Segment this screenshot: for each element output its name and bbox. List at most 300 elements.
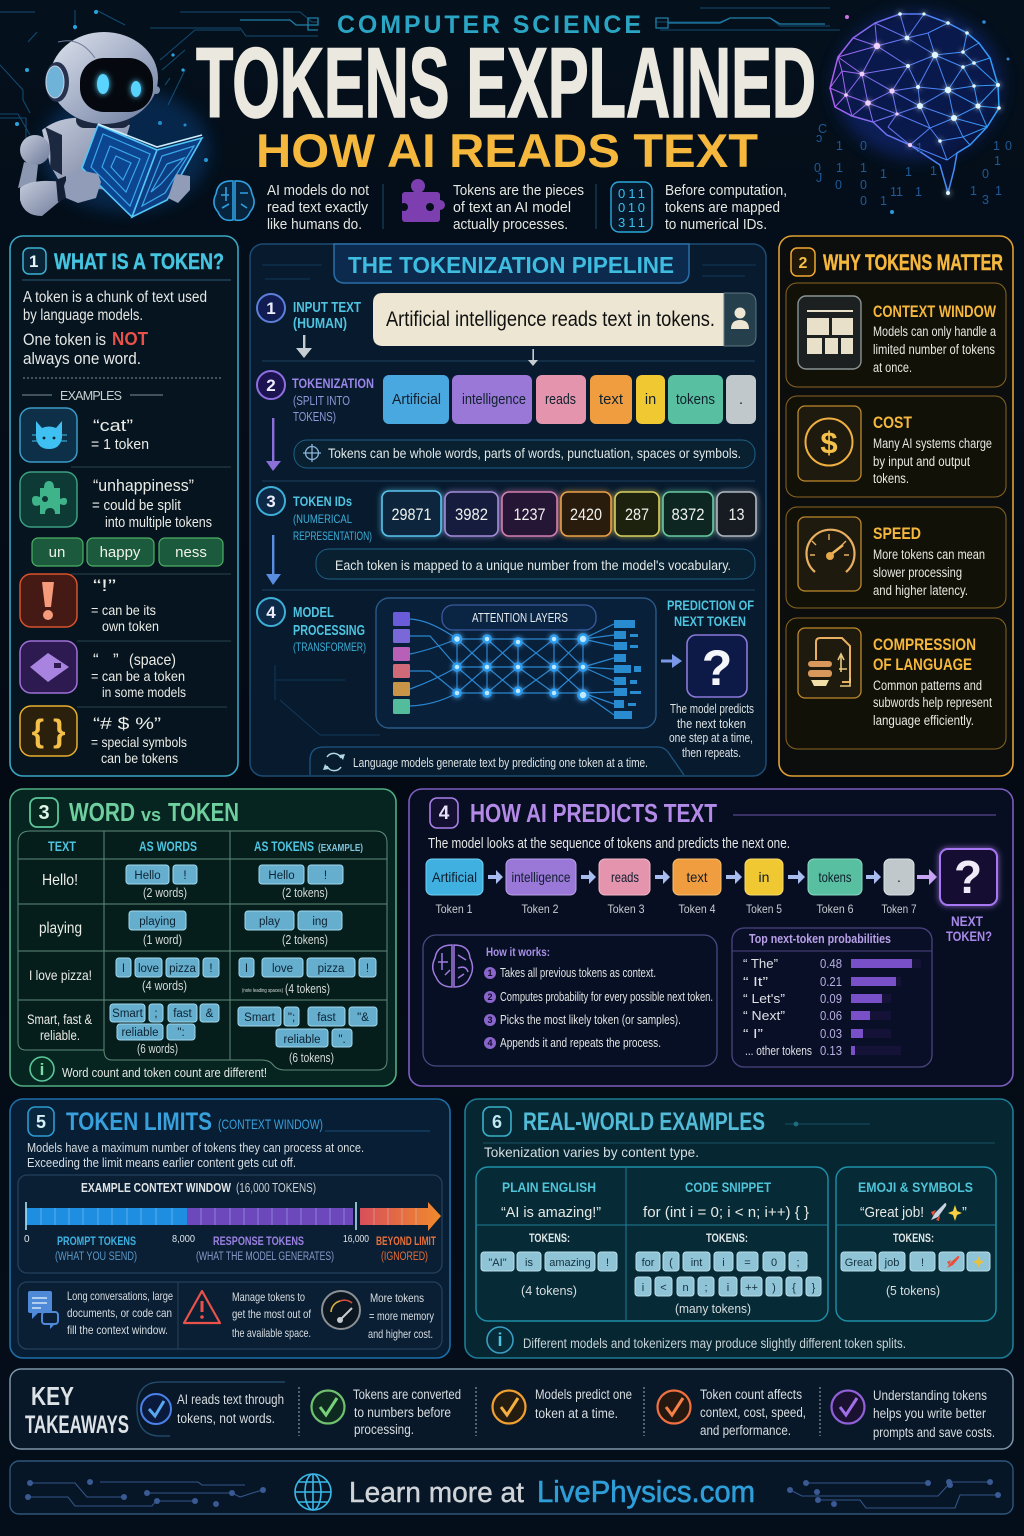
robot eyes [97,74,141,97]
axis labels [24,1234,369,1245]
probability labels: “ Next” [743,1009,785,1023]
prediction of next token: then repeats. [682,746,741,760]
token chips: un happy ness: un [49,544,65,561]
arrow: step 3 down [266,535,281,585]
card: speed [786,507,1006,608]
token chips: un happy ness: happy [100,544,141,561]
prediction of next token: one step at a time, [669,731,753,745]
takeaway 4: and performance. [700,1423,791,1438]
definition text: One token is [23,330,106,349]
description: Models have a maximum number of tokens they can process at once. [27,1141,364,1155]
segment labels: (WHAT THE MODEL GENERATES) [196,1251,334,1263]
header circuit decoration [0,8,840,210]
prediction of next token: ? [702,640,732,696]
output bars [614,620,641,719]
example: symbols: “# $ %” [93,714,161,733]
description: Exceeding the limit means earlier content gets cut off. [27,1156,296,1170]
token labels [436,902,917,916]
word chips: Smart [112,1008,144,1020]
icon: warning triangle [184,1291,220,1323]
column: plain english: “AI is amazing!” [501,1205,601,1221]
panel 4: how AI predicts text [409,789,1013,1086]
takeaway 2: processing. [354,1422,414,1437]
heading [23,248,224,274]
step 4: model processing [257,598,366,654]
note: tokens can be [294,440,755,468]
comparison table [18,831,387,1070]
input sentence box: Artificial intelligence reads text in tokens. [386,308,715,331]
column: plain english: "AI" [488,1257,507,1269]
column: code snippet: 0 [771,1257,777,1269]
column: plain english: is [525,1257,533,1269]
probability labels: ... other tokens [745,1044,812,1058]
takeaway 5: helps you write better [873,1406,986,1421]
heading: 4 [439,803,450,824]
token ID boxes: 2420 [570,505,602,524]
binary digit rain: 1 [836,139,843,153]
examples table: plain english and code [476,1167,828,1321]
token sequence: reads [611,869,639,885]
token chips: "; [288,1012,295,1024]
heading: TOKEN [168,797,239,827]
token chips: Smart [244,1012,276,1024]
row labels: I love pizza! [29,967,92,983]
heading [430,798,996,828]
binary digit rain: 1 [995,184,1002,198]
takeaway 5 [832,1388,995,1440]
step 4: model processing: PROCESSING [293,622,365,639]
binary digit rain: J [816,171,822,185]
probability bars [851,959,912,1055]
icon: rocket [931,1203,946,1221]
column: code snippet: ; [796,1257,800,1269]
card: context window [786,283,1006,387]
definition text: NOT [112,329,148,349]
tips box: Long conversations, large [67,1289,173,1303]
fact: AI reading: read text exactly [267,199,368,216]
next token box: ? [954,851,982,903]
binary digit rain: 1 [970,184,977,198]
token chips row: . [739,392,743,408]
segment labels [55,1236,436,1263]
token labels: Token 6 [816,902,854,916]
token sequence: intelligence [512,869,571,885]
bar: prompt tokens [26,1208,187,1225]
step 4: model processing: (TRANSFORMER) [293,640,366,654]
token ID boxes: 29871 [392,505,432,524]
column: plain english: (4 tokens) [521,1283,577,1298]
table header: AS WORDS [139,839,197,854]
binary digit rain: C [818,122,827,136]
column: code snippet: (many tokens) [675,1301,751,1316]
token chips row: reads [545,392,576,408]
column: plain english: TOKENS: [529,1231,570,1245]
card: compression of language: OF LANGUAGE [873,656,972,674]
step 3: token IDs: 3 [266,492,276,511]
fact: numerical IDs [665,182,787,233]
tips box [18,1282,442,1349]
card: compression of language [786,618,1006,749]
probability labels: “ The” [743,957,778,971]
probability labels: “ Let's” [743,992,785,1006]
arrow: step 1 down [296,335,312,358]
takeaways heading: KEY [31,1381,74,1411]
info note [487,1327,906,1353]
word chips: pizza [169,963,197,975]
token labels: Token 7 [882,902,917,916]
word chips: ": [177,1027,185,1039]
column: code snippet: i [727,1282,729,1294]
heading: 5 [36,1112,46,1132]
segment labels: (IGNORED) [381,1251,428,1263]
icon: globe [295,1474,331,1510]
panel 5: token limits [10,1099,450,1358]
token chips row [383,375,756,424]
example: space: ” [113,650,119,669]
step 2: tokenization: TOKENIZATION [292,375,374,391]
column: plain english [481,1179,617,1298]
word chips: reliable [121,1027,159,1039]
column: plain english: PLAIN ENGLISH [502,1179,596,1195]
card: speed: slower processing [873,565,962,580]
takeaway 5: Understanding tokens [873,1388,987,1403]
column: code snippet: int [691,1257,702,1269]
takeaway 3: token at a time. [535,1406,618,1421]
heading [30,797,239,827]
footer banner [10,1461,1013,1514]
table grid [18,831,387,1070]
count captions: (1 word) [143,933,182,947]
call to action [349,1474,755,1509]
definition text: A token is a chunk of text used [23,289,207,306]
column: code snippet: } [812,1282,816,1294]
tips box: documents, or code can [67,1306,172,1320]
note: vocabulary mapping [316,549,755,579]
token chips row: intelligence [462,392,526,408]
takeaway 3 [492,1387,632,1424]
binary digit rain: 1 [916,141,923,155]
heading: vs [141,805,161,825]
illustration: robot reading a glowing book [18,32,210,217]
definition text: by language models. [23,307,143,324]
token ID boxes: 13 [728,505,744,524]
probability table: Top next-token probabilities [749,931,891,946]
footer note: generation loop [310,747,684,775]
token ID boxes: 287 [625,505,649,524]
step 3: token IDs: REPRESENTATION) [293,529,372,543]
word chips [110,865,219,1040]
token chips: fast [317,1012,337,1024]
column: code snippet: ( [669,1257,673,1269]
segment labels: (WHAT YOU SEND) [55,1251,137,1263]
count captions [137,886,334,1065]
icon: puzzle piece [400,179,445,222]
steps list: 4 [487,1038,493,1048]
column: plain english: ! [606,1257,609,1269]
context window chart: EXAMPLE CONTEXT WINDOW [81,1181,231,1195]
context window chart: (16,000 TOKENS) [236,1181,316,1195]
heading: 6 [492,1112,502,1132]
steps list [484,966,713,1050]
tips box: = more memory [369,1309,434,1323]
illustration: neural network brain [830,11,1010,195]
example: exclamation: own token [102,618,159,634]
word chips: ; [154,1008,158,1020]
token chips: un happy ness [32,538,223,566]
token chips: ing [312,916,328,928]
binary digit rain: 1 [896,185,903,199]
takeaway 2: Tokens are converted [353,1387,461,1402]
binary digit rain: 0 [982,167,989,181]
token chips row: Artificial [392,392,441,408]
tips box: the available space. [232,1326,311,1340]
count captions: (2 words) [143,886,187,900]
prediction of next token: The model predicts [670,702,754,716]
column: code snippet: CODE SNIPPET [685,1179,771,1195]
column: code snippet: for (int i = 0; i < n; i++) { } [643,1205,809,1221]
example: exclamation [20,574,159,634]
card: compression of language: subwords help represent [873,695,992,710]
heading: 1 [29,252,38,271]
takeaway 5: prompts and save costs. [873,1425,995,1440]
binary digit rain: 0 [814,161,821,175]
step 4: model processing: MODEL [293,604,334,621]
token chips row: tokens [676,392,715,408]
binary digit rain: 1 [994,154,1001,168]
definition text: always one word. [23,349,141,368]
step 4: model processing: 4 [266,603,276,622]
example: unhappiness: into multiple tokens [105,515,212,531]
binary digit rain: 1 [930,164,937,178]
row labels: Hello! [42,872,78,889]
pipeline heading [334,244,689,283]
step 1: input text [257,294,361,332]
table header: TEXT [48,839,77,854]
card: cost: by input and output [873,454,970,469]
footer note: generation loop: Language models generate text by predicting one token at a time. [353,756,648,770]
example: space: “ [93,650,99,669]
examples label: EXAMPLES [60,389,122,403]
transformer network diagram [376,598,656,728]
card: compression of language: Common patterns and [873,678,982,693]
icon: binary box [611,182,652,232]
token sequence: tokens [818,869,852,885]
segment labels: RESPONSE TOKENS [213,1236,304,1248]
takeaway 4 [658,1387,806,1438]
prediction of next token: PREDICTION OF [667,597,754,613]
token ID boxes: 3982 [455,505,488,524]
binary digit rain: 1 [993,139,1000,153]
column: code snippet: ) [772,1282,776,1294]
step 2: tokenization: (SPLIT INTO [293,393,350,408]
example: exclamation: “!” [93,576,116,595]
axis labels: 8,000 [172,1234,195,1245]
column: code snippet: i [722,1257,725,1269]
card: context window: Models can only handle a [873,324,996,339]
table header: AS TOKENS [254,839,314,854]
input sentence box [373,293,756,346]
examples box: emoji and symbols [836,1167,996,1321]
steps list: 3 [487,1015,493,1025]
segment labels: PROMPT TOKENS [57,1236,136,1248]
header title block [196,11,816,177]
steps list: Appends it and repeats the process. [500,1036,661,1050]
token chips: love [272,963,293,975]
heading: HOW AI PREDICTS TEXT [470,798,717,828]
panel 3: word vs token [10,789,396,1086]
fact: token pieces [453,182,584,233]
info note: Different models and tokenizers may produce slightly different token splits. [523,1336,906,1351]
binary digit rain: 1 [860,161,867,175]
word chips: I [122,963,125,975]
network connections [410,619,614,715]
probability labels: “ I” [743,1027,763,1041]
token labels: Token 5 [746,902,782,916]
probability values: 0.13 [820,1044,842,1058]
steps list: 1 [487,968,493,978]
info note: Word count and token count are different! [62,1066,267,1080]
note: vocabulary mapping: Each token is mapped to a unique number from the model's vocabulary. [335,557,731,573]
examples box: emoji and symbols: ” [962,1205,967,1221]
probability values: 0.03 [820,1027,842,1041]
tips box: More tokens [370,1291,424,1305]
arrow: to prediction [661,654,682,668]
icon: binary box: 011 [618,186,645,201]
probability values: 0.21 [820,975,842,989]
icon: dollar coin [798,406,861,481]
binary digit rain: 0 [1005,139,1012,153]
table header [48,839,363,854]
card: context window: limited number of tokens [873,342,995,357]
step 3: token IDs [257,487,372,543]
examples box: emoji and symbols: job [884,1257,899,1269]
steps list: Takes all previous tokens as context. [500,966,656,980]
input embedding squares [393,612,410,714]
example: space: in some models [102,684,186,700]
token ID boxes: 8372 [672,505,704,524]
attention layers label [442,605,596,630]
icon: binary box: 010 [618,200,645,215]
takeaways heading [25,1381,129,1439]
word chips: Hello [134,870,161,882]
token chips: reliable [283,1034,321,1046]
heading: (CONTEXT WINDOW) [218,1116,323,1132]
icon: brain outline [214,181,254,220]
tips box: get the most out of [232,1307,312,1321]
takeaway 1 [137,1382,285,1436]
binary digit rain: 0 [860,139,867,153]
examples box: emoji and symbols: “Great job! [860,1205,924,1221]
card: cost: tokens. [873,471,909,486]
description [27,1141,364,1170]
count captions: (2 tokens) [282,933,328,947]
card: compression of language: language efficiently. [873,713,974,728]
call to action: Learn more at [349,1477,524,1509]
column: code snippet: { [792,1282,796,1294]
step 1: input text: INPUT TEXT [293,300,361,316]
subtitle: HOW AI READS TEXT [256,124,758,177]
column: plain english: amazing [549,1257,591,1269]
arrow: step 2 down [266,418,281,471]
table header: (EXAMPLE) [318,843,363,854]
fact: token pieces: actually processes. [453,216,568,233]
circuit ends around overline [240,18,825,30]
fact: numerical IDs: tokens are mapped [665,199,780,216]
count captions: (4 tokens) [285,982,330,996]
takeaway 4: Token count affects [700,1387,802,1402]
bar: beyond limit arrow [360,1202,441,1231]
icon: sparkles [948,1205,962,1221]
pipeline heading: THE TOKENIZATION PIPELINE [348,252,674,278]
takeaway 3: Models predict one [535,1387,632,1402]
token ID boxes: 1237 [514,505,546,524]
subtitle: Tokenization varies by content type. [484,1144,699,1160]
count captions: (6 tokens) [289,1051,334,1065]
word chips: love [138,963,159,975]
binary digit rain: 1 [836,161,843,175]
steps list: Computes probability for every possible next token. [500,990,713,1004]
example: symbols: = special symbols [91,734,187,750]
step 1: input text: (HUMAN) [293,316,347,332]
step 3: token IDs: TOKEN IDs [293,493,352,509]
binary digit rain: 1 [905,165,912,179]
axis labels: 16,000 [343,1234,369,1245]
icon: binary box: 311 [618,215,645,230]
column: code snippet: < [660,1282,667,1294]
example: symbols: can be tokens [101,750,178,766]
card: cost: Many AI systems charge [873,436,992,451]
step 1: input text: 1 [266,299,276,318]
row labels: playing [39,920,82,937]
takeaways heading: TAKEAWAYS [25,1411,129,1439]
heading: REAL-WORLD EXAMPLES [523,1108,765,1136]
token sequence: text [686,869,708,885]
network nodes [453,634,588,700]
attention layers label: ATTENTION LAYERS [472,611,568,625]
example: symbols [20,706,187,766]
binary digit rain: 1 [915,185,922,199]
bar: response tokens [187,1208,353,1225]
fact: AI reading [267,182,370,233]
token labels: Token 3 [608,902,645,916]
word chips: fast [173,1008,193,1020]
next token box: NEXT [951,913,983,929]
row labels: Smart, fast & [27,1012,92,1027]
example: exclamation: = can be its [91,602,156,618]
example: space: (space) [129,652,176,669]
icon: speedometer [798,517,861,591]
token labels: Token 2 [522,902,559,916]
takeaway 1: AI reads text through [177,1392,284,1407]
token chips: ! [366,963,369,975]
card: cost: COST [873,414,912,432]
column: code snippet: for [642,1257,655,1269]
probability tracks [851,959,921,1055]
token ID boxes [382,491,756,536]
row labels: reliable. [40,1028,80,1043]
card: context window: at once. [873,360,912,375]
token chips row: in [645,392,656,408]
icon: chat bubbles [28,1291,58,1329]
binary digit rain: 0 [860,194,867,208]
card: speed: More tokens can mean [873,547,985,562]
token chips: I [245,963,248,975]
example: space: = can be a token [91,668,185,684]
panel 1: what is a token [10,236,238,776]
column: code snippet: n [682,1282,689,1294]
steps list: 2 [487,992,493,1002]
example: cat: = 1 token [91,436,149,453]
